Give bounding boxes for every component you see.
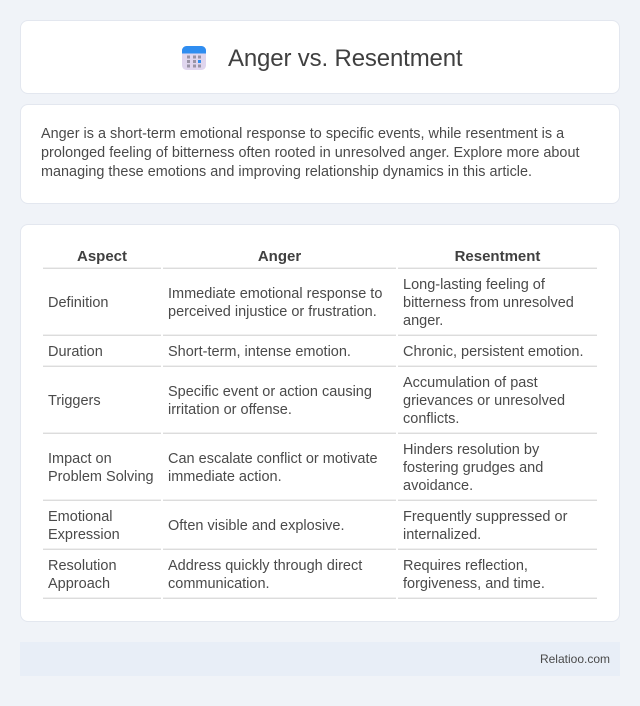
Resentment impact: avoidance. bbox=[403, 478, 473, 494]
Resentment triggers: conflicts. bbox=[403, 411, 459, 427]
row label: Resolution Approach: Approach bbox=[48, 576, 110, 592]
Resentment definition bbox=[403, 277, 574, 329]
Resentment definition: bitterness from unresolved bbox=[403, 295, 574, 311]
row label: Resolution Approach: Resolution bbox=[48, 558, 117, 574]
Resentment expression: internalized. bbox=[403, 527, 481, 543]
Resentment expression: Frequently suppressed or bbox=[403, 509, 567, 525]
Resentment triggers bbox=[403, 375, 565, 427]
Resentment expression bbox=[403, 509, 568, 543]
intro card bbox=[20, 104, 620, 204]
Anger resolution: communication. bbox=[168, 576, 270, 592]
row label: Triggers: Triggers bbox=[48, 393, 101, 409]
Anger duration: Short-term, intense emotion. bbox=[168, 344, 351, 360]
Anger impact: Can escalate conflict or motivate bbox=[168, 451, 378, 467]
intro text: prolonged feeling of bitterness often rooted in unresolved anger. Explore more about bbox=[41, 145, 579, 161]
row label: Impact on Problem Solving: Problem Solving bbox=[48, 469, 154, 485]
footer bar bbox=[20, 642, 620, 676]
Anger expression: Often visible and explosive. bbox=[168, 518, 345, 534]
Resentment definition: Long-lasting feeling of bbox=[403, 277, 545, 293]
Resentment resolution: Requires reflection, bbox=[403, 558, 528, 574]
intro text: Anger is a short-term emotional response to specific events, while resentment is a bbox=[41, 126, 564, 142]
Resentment impact bbox=[403, 442, 543, 494]
Resentment triggers: grievances or unresolved bbox=[403, 393, 565, 409]
Anger resolution: Address quickly through direct bbox=[168, 558, 362, 574]
table header: Aspect: Aspect bbox=[77, 248, 127, 265]
Resentment resolution bbox=[403, 558, 545, 592]
row label: Duration: Duration bbox=[48, 344, 103, 360]
Resentment impact: fostering grudges and bbox=[403, 460, 543, 476]
icon: calendar bbox=[182, 46, 206, 70]
footer text: Relatioo.com bbox=[540, 652, 610, 666]
title: Anger vs. Resentment bbox=[228, 45, 462, 72]
Resentment impact: Hinders resolution by bbox=[403, 442, 539, 458]
row label: Emotional Expression: Expression bbox=[48, 527, 120, 543]
Anger definition bbox=[168, 286, 382, 320]
header card bbox=[20, 20, 620, 94]
Anger triggers bbox=[168, 384, 372, 418]
row label: Impact on Problem Solving bbox=[48, 451, 154, 485]
intro text bbox=[41, 126, 580, 180]
Resentment duration: Chronic, persistent emotion. bbox=[403, 344, 584, 360]
Anger definition: Immediate emotional response to bbox=[168, 286, 382, 302]
table header: Anger: Anger bbox=[258, 248, 301, 265]
Anger definition: perceived injustice or frustration. bbox=[168, 304, 377, 320]
row label: Resolution Approach bbox=[48, 558, 117, 592]
Anger resolution bbox=[168, 558, 362, 592]
row label: Emotional Expression bbox=[48, 509, 120, 543]
Resentment definition: anger. bbox=[403, 313, 443, 329]
Anger impact bbox=[168, 451, 378, 485]
Anger impact: immediate action. bbox=[168, 469, 282, 485]
row label: Emotional Expression: Emotional bbox=[48, 509, 112, 525]
table header: Resentment: Resentment bbox=[455, 248, 540, 265]
intro text: managing these emotions and improving relationship dynamics in this article. bbox=[41, 164, 532, 180]
row label: Impact on Problem Solving: Impact on bbox=[48, 451, 112, 467]
Anger triggers: irritation or offense. bbox=[168, 402, 292, 418]
Resentment resolution: forgiveness, and time. bbox=[403, 576, 545, 592]
Resentment triggers: Accumulation of past bbox=[403, 375, 538, 391]
table card bbox=[20, 224, 620, 622]
row label: Definition: Definition bbox=[48, 295, 108, 311]
Anger triggers: Specific event or action causing bbox=[168, 384, 372, 400]
